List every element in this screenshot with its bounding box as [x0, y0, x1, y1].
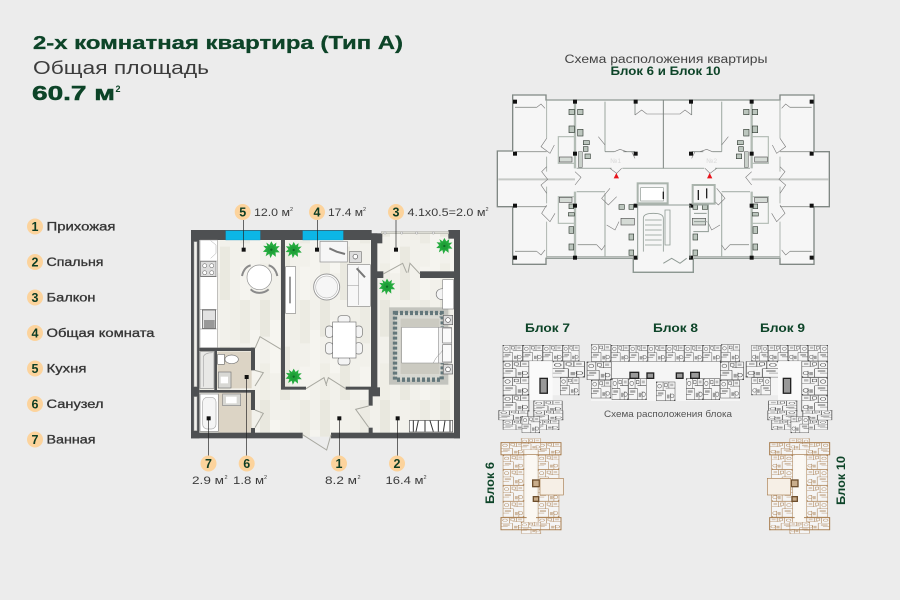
- area label 7: [192, 456, 228, 487]
- apartment numbers: №2: [706, 158, 717, 165]
- utility niche: [200, 352, 214, 388]
- total area value: 60.7 м: [32, 83, 115, 105]
- area label 4: 4: [314, 206, 321, 220]
- side windows: [194, 242, 197, 431]
- area label 6: 6: [243, 457, 250, 471]
- block 8 label: Блок 8: [653, 323, 699, 335]
- area label 5: 12.0 м: [254, 207, 290, 219]
- walls: [191, 230, 460, 438]
- legend item 5: [27, 360, 86, 376]
- doors: [255, 263, 420, 450]
- block 8 plan: [587, 344, 744, 401]
- block 9 label: Блок 9: [760, 323, 805, 335]
- area label 5: 2: [290, 207, 293, 213]
- area label 1: 1: [336, 457, 343, 471]
- block 6 label: Блок 6: [485, 462, 497, 504]
- block 6 plan: [501, 439, 563, 534]
- area label 4: [309, 204, 366, 220]
- area label 2: 16.4 м: [386, 475, 424, 487]
- area label 1: 2: [358, 475, 361, 481]
- area label 7: 2: [224, 475, 228, 481]
- legend item 1: Прихожая: [46, 222, 116, 234]
- area label 2: [386, 456, 427, 487]
- area label 3: [388, 204, 489, 220]
- apartment numbers: №1: [610, 158, 621, 165]
- balcony railing: [381, 232, 449, 234]
- block 10 plan: [767, 439, 830, 534]
- legend item 2: Спальня: [46, 257, 104, 269]
- apartment markers: red triangles: [614, 173, 712, 178]
- block 10 label: Блок 10: [836, 456, 848, 505]
- block 7 plan: [498, 345, 585, 433]
- legend item 7: 7: [32, 433, 39, 447]
- floor plan: [191, 220, 460, 457]
- area label 4: 17.4 м: [328, 207, 363, 219]
- toilet and sink: WC: [218, 354, 238, 388]
- area label 7: 2.9 м: [192, 475, 224, 487]
- area label 1: [325, 456, 361, 487]
- dining table: kitchen: [242, 265, 277, 293]
- round rug: [314, 274, 340, 300]
- wardrobe: [409, 420, 453, 432]
- legend item 6: [27, 396, 104, 412]
- area label 2: 2: [424, 475, 427, 481]
- apartment location heading: Схема расположения квартиры: [564, 54, 768, 66]
- kitchen counter: [200, 240, 217, 348]
- right half of plan: [663, 100, 828, 260]
- block plans: [498, 344, 832, 534]
- title: 2-х комнатная квартира (Тип А): [33, 32, 403, 53]
- building outline: [497, 95, 829, 272]
- area label 3: 2: [486, 207, 489, 213]
- area label 5: [235, 204, 293, 220]
- legend item 6: 6: [32, 398, 39, 412]
- area label 3: 3: [393, 206, 400, 220]
- blue windows: [226, 231, 343, 240]
- block location caption: Схема расположения блока: [604, 409, 733, 420]
- area label 7: 7: [205, 457, 212, 471]
- legend item 3: Балкон: [46, 293, 96, 305]
- legend item 5: Кухня: [46, 364, 86, 376]
- area label 6: 2: [264, 475, 267, 481]
- legend: rooms: [27, 218, 155, 448]
- apartment location heading: [564, 54, 768, 78]
- legend item 7: [27, 432, 96, 448]
- legend item 6: Санузел: [46, 399, 104, 411]
- area label 6: [233, 456, 267, 487]
- legend item 3: 3: [32, 291, 39, 305]
- legend item 1: [27, 218, 116, 234]
- total area value: 2: [116, 84, 121, 94]
- sofa: [347, 265, 370, 306]
- apartment location heading: Блок 6 и Блок 10: [610, 66, 720, 78]
- legend item 2: 2: [32, 256, 39, 270]
- subtitle: total area label: Общая площадь: [33, 58, 209, 78]
- area label 3: 4.1x0.5=2.0 м: [408, 207, 486, 219]
- bathroom floors: [217, 352, 252, 388]
- block 9 plan: [746, 345, 832, 433]
- floor: [193, 233, 457, 437]
- dining table: living room: [326, 316, 362, 365]
- left half of plan: [498, 100, 663, 260]
- bathtub and sink: [200, 394, 241, 431]
- block 7 label: Блок 7: [525, 323, 570, 335]
- legend item 4: Общая комната: [46, 328, 155, 340]
- area label 5: 5: [239, 206, 246, 220]
- bedroom rug and bed: [389, 307, 453, 385]
- armchair and side table: [320, 241, 361, 262]
- desk and chair: [436, 280, 454, 309]
- area label 1: 8.2 м: [325, 475, 357, 487]
- legend item 7: Ванная: [46, 435, 96, 447]
- legend item 1: 1: [32, 220, 39, 234]
- area label 2: 2: [394, 457, 401, 471]
- total area value: [32, 83, 121, 105]
- legend item 5: 5: [32, 362, 39, 376]
- legend item 2: [27, 254, 104, 270]
- area label 4: 2: [363, 207, 366, 213]
- apartment numbers: [610, 158, 717, 165]
- legend item 4: 4: [32, 326, 39, 340]
- area label 6: 1.8 м: [233, 475, 264, 487]
- legend item 3: [27, 290, 96, 306]
- central elevator and stairs: [633, 183, 715, 272]
- tv stand: [286, 267, 296, 313]
- legend item 4: [27, 325, 155, 341]
- apartment location floor plan: [497, 95, 829, 272]
- leader lines and markers: [207, 220, 400, 457]
- plants: [263, 238, 452, 385]
